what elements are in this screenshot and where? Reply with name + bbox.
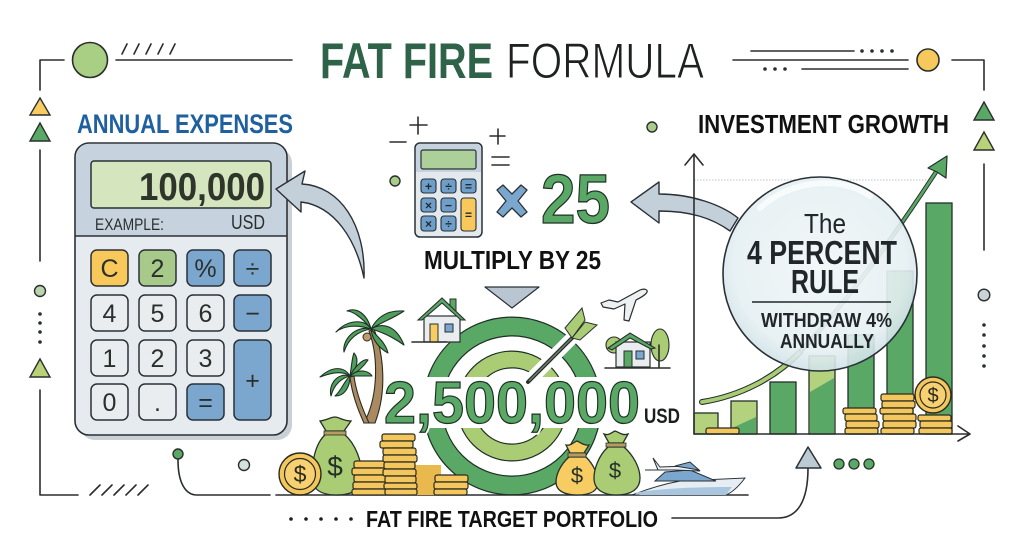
small calculator icon: × [425,217,432,231]
target amount: 2,500,000 [384,370,640,436]
keypad: ÷ [246,255,259,283]
small calculator icon: − [445,198,452,212]
small calculator icon: = [465,208,472,222]
coin stacks center [352,434,468,495]
arrow: footer to chart [672,447,821,518]
arrow: to multiply [631,182,738,231]
house left [412,298,465,342]
house right [605,329,670,368]
airplane [601,289,647,321]
keypad: 0 [103,389,116,417]
small calculator icon: ÷ [445,180,452,194]
money bag left: $ [327,451,343,482]
heading: investment growth: INVESTMENT GROWTH [698,109,949,139]
small calculator icon: + [425,180,432,194]
math symbols around small calculator [390,117,509,186]
currency label: USD [231,212,265,234]
keypad: − [245,300,260,328]
lens: the 4 percent rule: ANNUALLY [780,331,875,353]
keypad [91,250,271,420]
coin left: $ [294,461,307,487]
coin left [279,453,321,495]
growth chart [685,154,970,441]
coin stacks [706,394,952,434]
number 25: 25 [541,160,610,238]
example label: EXAMPLE: [95,215,164,234]
arrow in target [528,308,597,382]
decorative header right: lines, dots, circle [733,49,984,90]
heading: annual expenses: ANNUAL EXPENSES [77,109,293,139]
small calculator icon: = [465,180,472,194]
money bag left [312,417,362,495]
down triangle [485,287,539,308]
coin [915,377,951,413]
display value: 100,000 [139,166,265,209]
keypad: 6 [199,300,212,328]
money bag yellow [556,441,598,495]
keypad: 1 [103,345,116,373]
money bag yellow: $ [571,463,583,488]
three dots [834,459,874,469]
palm trees [320,310,404,423]
title [320,33,705,89]
right column decoration [974,102,994,368]
small calculator icon: ÷ [445,217,452,231]
lens: the 4 percent rule [723,177,917,371]
money bag green right [594,431,640,495]
footer label: FAT FIRE TARGET PORTFOLIO [366,506,658,532]
yacht [632,458,745,495]
money bag green right: $ [609,458,621,483]
bars [694,203,952,434]
title: FORMULA [506,33,705,89]
keypad: % [194,255,217,283]
axes [685,154,970,441]
lens text: The [804,208,846,239]
arrow: to calculator [276,171,364,278]
ground line [276,494,748,496]
target amount: USD [644,405,680,428]
lens: the 4 percent rule: RULE [791,263,859,300]
heading: multiply by 25: MULTIPLY BY 25 [424,245,601,275]
small calculator icon [415,143,482,237]
calculator: annual expenses [75,143,292,440]
coin: $ [927,385,939,407]
lens: the 4 percent rule: 4 PERCENT [747,234,897,271]
multiply sign [497,185,527,217]
keypad: = [198,389,213,417]
keypad: 2 [151,255,164,283]
dot near arrow [647,122,657,132]
keypad: 4 [103,300,117,328]
growth trend arrow [702,156,947,402]
title: FAT FIRE [320,33,493,89]
small calculator icon: × [425,198,432,212]
target rings [418,326,608,486]
footer accent line with node [173,449,270,495]
target amount: 2,500,000 [384,370,640,436]
keypad: 2 [151,345,164,373]
keypad: 3 [199,345,212,373]
keypad: 5 [151,300,164,328]
keypad: C [100,255,119,283]
left column decoration [30,98,148,495]
decorative header left: frame, circle, hatch [40,42,292,90]
keypad: + [245,367,260,395]
keypad: . [154,389,161,417]
lens: the 4 percent rule: WITHDRAW 4% [761,310,892,332]
